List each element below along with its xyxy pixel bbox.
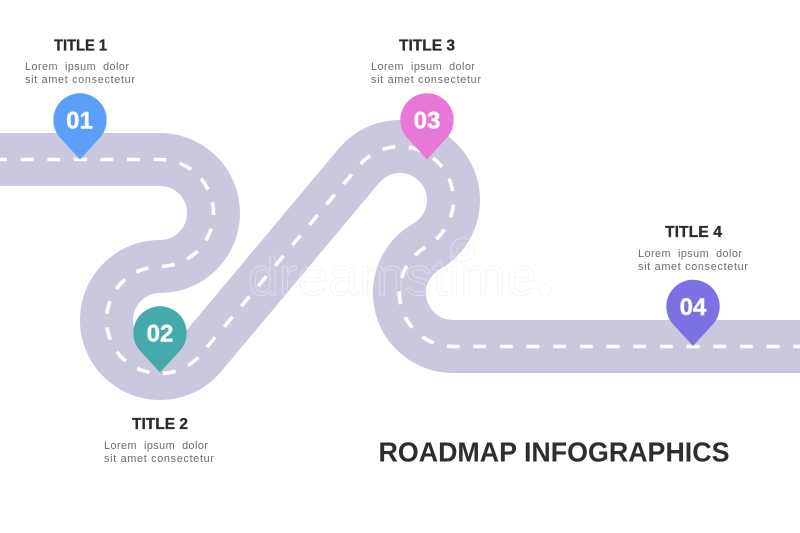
text block 3 (371, 38, 481, 86)
watermark: dreamstime (248, 247, 537, 307)
pin 2: 02 (147, 320, 173, 348)
text block 1: sit amet consectetur (25, 74, 135, 86)
text block 1: Lorem ipsum dolor (25, 61, 129, 73)
text block 1: TITLE 1 (54, 38, 107, 54)
pin 2 (133, 306, 187, 372)
pin 1: 01 (66, 108, 93, 134)
road (0, 147, 800, 374)
pin 1 (53, 93, 107, 160)
text block 2 (104, 416, 214, 465)
pin 3: 03 (414, 108, 440, 134)
heading: ROADMAP INFOGRAPHICS (378, 436, 730, 468)
pin 4 (666, 280, 720, 346)
text block 2: sit amet consectetur (104, 453, 214, 465)
text block 1 (25, 38, 135, 86)
text block 3: sit amet consectetur (371, 74, 481, 86)
text block 4: Lorem ipsum dolor (638, 248, 742, 260)
text block 2: TITLE 2 (132, 416, 188, 433)
pin 3 (400, 93, 454, 160)
text block 3: TITLE 3 (399, 38, 455, 54)
text block 3: Lorem ipsum dolor (371, 61, 475, 73)
text block 4: sit amet consectetur (638, 261, 748, 273)
text block 4: TITLE 4 (665, 224, 722, 241)
text block 2: Lorem ipsum dolor (104, 440, 208, 452)
text block 4 (638, 224, 748, 273)
pin 4: 04 (680, 294, 707, 321)
